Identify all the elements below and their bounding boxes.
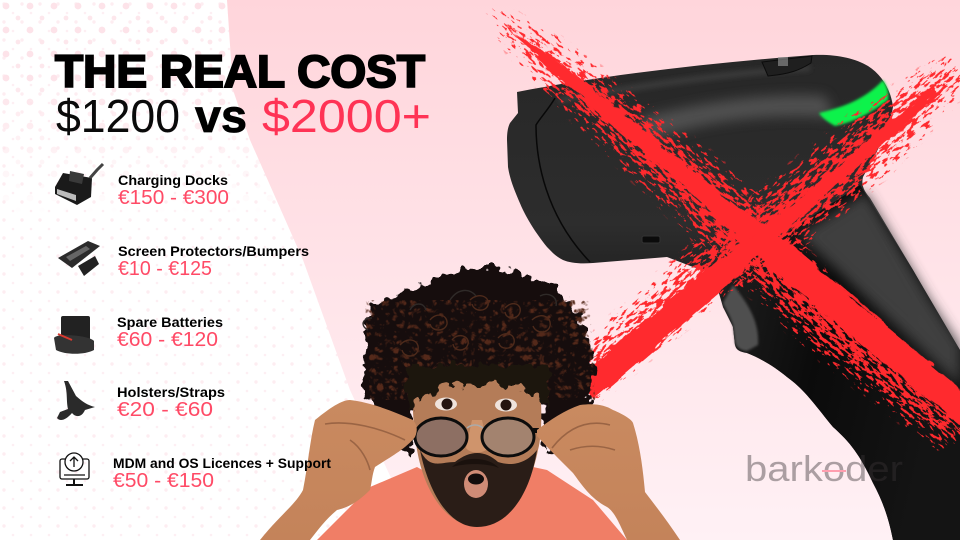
finger shadows bbox=[325, 423, 615, 470]
hair fringe bbox=[405, 365, 548, 412]
item: MDM and OS licences: €50 - €150 bbox=[113, 470, 214, 492]
icon: holster bbox=[57, 381, 95, 420]
green LED bbox=[819, 80, 888, 126]
subtitle: price comparison: vs bbox=[195, 90, 247, 142]
item: charging docks: €150 - €300 bbox=[118, 187, 229, 209]
person with glasses bbox=[260, 268, 680, 540]
hair bbox=[363, 268, 595, 455]
nose bbox=[466, 420, 488, 452]
icon: charging dock bbox=[55, 164, 103, 205]
icon: screen protector and bumper bbox=[58, 241, 100, 276]
item: spare batteries bbox=[54, 314, 223, 354]
item: screen protectors: Screen Protectors/Bumpers bbox=[118, 243, 309, 259]
item: charging docks: Charging Docks bbox=[118, 172, 228, 188]
subtitle: price comparison: $1200 bbox=[56, 90, 180, 142]
barcode scanner bbox=[507, 55, 960, 540]
scanner grip shading bbox=[723, 185, 960, 540]
glasses bbox=[411, 418, 539, 456]
title: THE REAL COST bbox=[55, 46, 425, 97]
face bbox=[413, 375, 541, 527]
item: holsters and straps bbox=[57, 381, 225, 421]
item: screen protectors bbox=[58, 241, 309, 280]
subtitle: price comparison: $2000+ bbox=[262, 90, 431, 142]
brush stroke: bottom left to top right bbox=[565, 44, 960, 410]
left hand bbox=[260, 400, 417, 540]
subtitle: price comparison bbox=[56, 90, 431, 142]
beard bbox=[420, 450, 537, 527]
scanner highlights bbox=[536, 56, 960, 385]
brush stroke: top left to bottom right bbox=[454, 0, 960, 450]
item: spare batteries: €60 - €120 bbox=[117, 329, 218, 351]
item: charging docks bbox=[55, 164, 229, 209]
icon: battery charger bbox=[54, 316, 94, 354]
item: spare batteries: Spare Batteries bbox=[117, 314, 223, 330]
item: holsters and straps: Holsters/Straps bbox=[117, 384, 225, 400]
item: MDM and OS licences: MDM and OS Licences + Support bbox=[113, 455, 331, 471]
mouth bbox=[452, 459, 499, 498]
icon: monitor with update bbox=[60, 453, 89, 485]
red brush X bbox=[454, 0, 960, 450]
item: holsters and straps: €20 - €60 bbox=[117, 399, 213, 421]
logo: barkoder: barkoder bbox=[745, 448, 903, 489]
eyes bbox=[435, 398, 517, 412]
title bbox=[55, 46, 431, 142]
shirt bbox=[317, 467, 627, 540]
item: MDM and OS licences bbox=[60, 453, 331, 492]
item: screen protectors: €10 - €125 bbox=[118, 258, 212, 280]
right hand bbox=[537, 404, 680, 540]
